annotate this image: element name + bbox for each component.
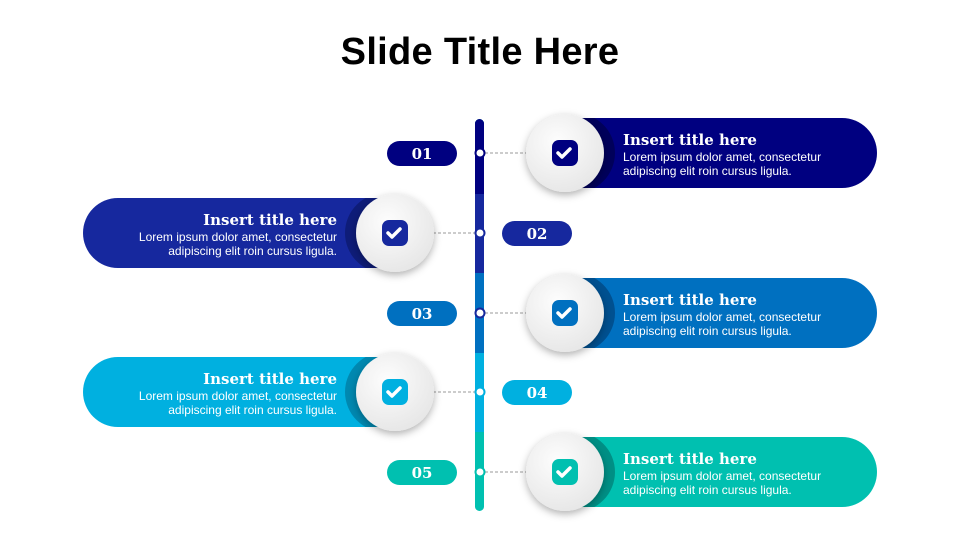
item 02: Lorem ipsum dolor amet, consectetur [139,230,337,244]
item 05: adipiscing elit roin cursus ligula. [623,483,792,497]
item 03: Insert title here [623,291,757,309]
item 04: 04 [527,384,547,402]
item 04 [83,352,572,432]
item 05: Insert title here [623,450,757,468]
item 02: 02 [527,225,547,243]
item 04: Lorem ipsum dolor amet, consectetur [139,389,337,403]
item 01: adipiscing elit roin cursus ligula. [623,164,792,178]
item 04: adipiscing elit roin cursus ligula. [168,403,337,417]
title: Slide Title Here [341,31,619,73]
item 01: Insert title here [623,131,757,149]
item 02 [83,193,572,273]
timeline bar [475,119,484,511]
item 03: 03 [412,305,432,323]
item 03: adipiscing elit roin cursus ligula. [623,324,792,338]
item 05: 05 [412,464,432,482]
item 01: 01 [412,145,432,163]
item 01: Lorem ipsum dolor amet, consectetur [623,150,821,164]
item 05: Lorem ipsum dolor amet, consectetur [623,469,821,483]
item 02: adipiscing elit roin cursus ligula. [168,244,337,258]
item 04: Insert title here [203,370,337,388]
item 03: Lorem ipsum dolor amet, consectetur [623,310,821,324]
item 02: Insert title here [203,211,337,229]
item 05 [387,432,877,512]
item 01 [387,113,877,193]
item 03 [387,273,877,353]
